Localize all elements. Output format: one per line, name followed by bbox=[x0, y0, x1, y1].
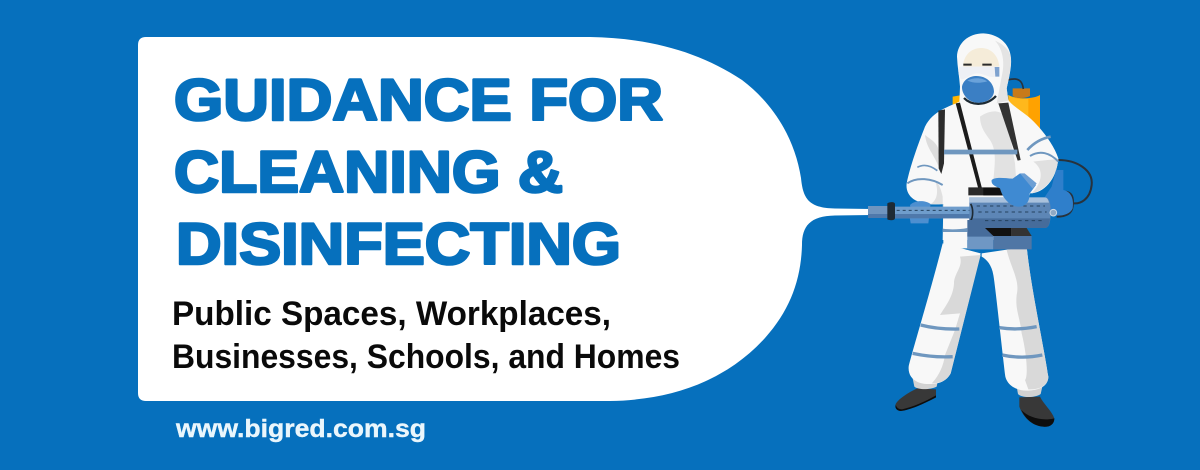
leg stripes bbox=[913, 325, 1042, 357]
shoes bbox=[895, 388, 1054, 427]
waist and lower box bbox=[943, 220, 1032, 249]
gun cylinder bbox=[969, 197, 1051, 228]
cuffs bbox=[913, 378, 938, 389]
hose bbox=[1058, 160, 1092, 203]
website url: www.bigred.com.sg bbox=[175, 415, 426, 443]
legs bbox=[895, 243, 1054, 427]
eyebrows bbox=[963, 64, 992, 66]
gun ring bbox=[887, 202, 895, 220]
title: GUIDANCE FOR bbox=[174, 68, 663, 133]
gun nozzle bbox=[868, 206, 890, 218]
mask tube bbox=[992, 79, 1023, 89]
tank cap bbox=[1013, 88, 1030, 98]
hood bbox=[957, 33, 1011, 106]
trouser left bbox=[909, 243, 981, 384]
respirator bbox=[964, 96, 996, 104]
worker figure with fogging gun bbox=[868, 33, 1092, 427]
title: DISINFECTING bbox=[176, 212, 621, 277]
harness straps bbox=[938, 109, 945, 174]
trouser right bbox=[982, 247, 1048, 391]
right glove bbox=[992, 173, 1036, 207]
trigger housing bbox=[968, 187, 1008, 195]
subtitle: Public Spaces, Workplaces, bbox=[172, 295, 611, 333]
suit stripes bbox=[907, 137, 1058, 185]
valves bbox=[1045, 170, 1073, 216]
subtitle: Businesses, Schools, and Homes bbox=[172, 338, 680, 376]
title: CLEANING & bbox=[174, 140, 563, 205]
subtitle bbox=[172, 295, 680, 376]
goggles bbox=[958, 67, 1000, 79]
backpack bbox=[868, 33, 1092, 240]
face bbox=[963, 48, 999, 67]
gun tube bbox=[893, 207, 973, 218]
speech panel with spray nozzle bbox=[138, 37, 872, 401]
suit shading bbox=[980, 111, 1017, 187]
title bbox=[174, 68, 663, 277]
suit body bbox=[907, 100, 1058, 240]
left glove fingers bbox=[909, 215, 929, 223]
